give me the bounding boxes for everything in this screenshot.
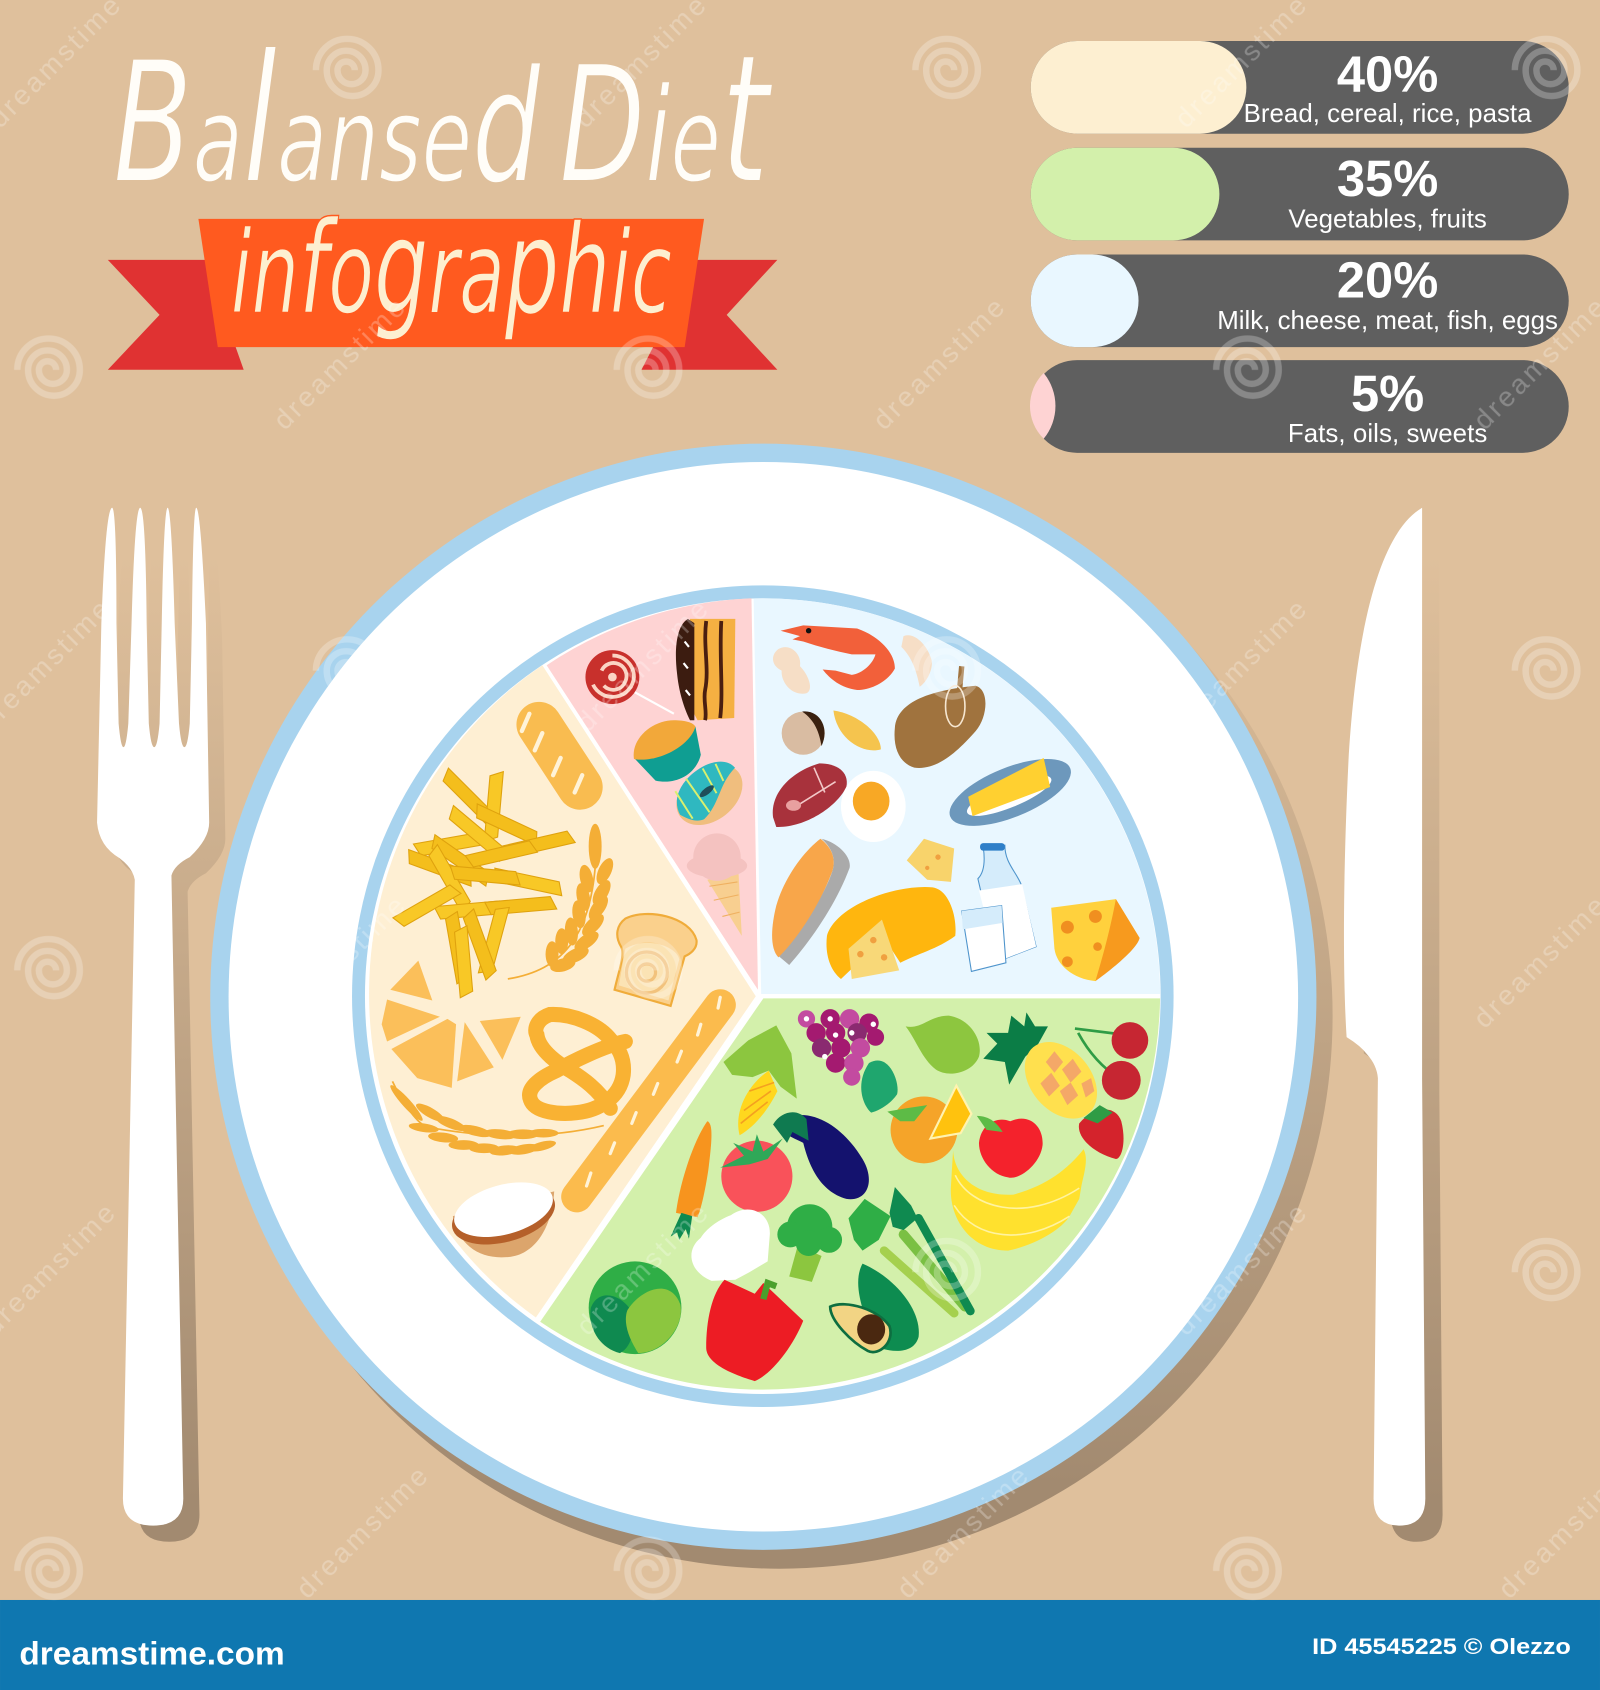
legend row: 40 percent: Bread, cereal, rice, pasta [1244, 100, 1532, 128]
pie slice: milk, meat, fish [754, 598, 1160, 994]
eggplant [773, 1112, 869, 1199]
milk bottle [978, 843, 1036, 962]
wheat ear lying [387, 1081, 604, 1157]
milk glass [962, 906, 1006, 971]
orange with lemon slice [887, 1086, 971, 1163]
watermark pattern: dreamstime [1168, 1197, 1312, 1341]
tomato [720, 1134, 792, 1212]
peanuts [773, 635, 932, 694]
fork [97, 508, 225, 1542]
cherries [1075, 1022, 1148, 1100]
pie slice: sweets [547, 598, 758, 990]
baguette [577, 997, 720, 1197]
banner text: infographic [231, 192, 672, 345]
legend row: 35 percent [1031, 148, 1569, 240]
pie slice: vegetables and fruits [540, 998, 1160, 1390]
almond [833, 711, 881, 750]
penne pasta [393, 768, 575, 998]
carrot [671, 1121, 711, 1240]
legend bars [1030, 41, 1569, 453]
hazelnut [782, 711, 825, 755]
legend row: 5 percent: 5% [1351, 365, 1424, 422]
roast chicken [895, 666, 985, 768]
bread loaf [522, 714, 582, 792]
bananas [951, 1149, 1086, 1251]
grapes [798, 1009, 884, 1086]
watermark pattern: dreamstime [570, 1197, 714, 1341]
cake slice [676, 619, 735, 720]
celery [849, 1187, 970, 1313]
watermark pattern: dreamstime [890, 1460, 1034, 1604]
legend row: 35 percent: Vegetables, fruits [1288, 205, 1487, 233]
shrimp [781, 625, 895, 690]
watermark pattern: dreamstime [1168, 593, 1312, 737]
wheat ear upright [508, 824, 617, 979]
legend row: 20 percent [1031, 252, 1569, 347]
legend row: 5 percent [1030, 360, 1569, 453]
pear [906, 1016, 980, 1074]
food: grains [382, 714, 720, 1257]
apple [977, 1116, 1043, 1178]
plate [210, 444, 1333, 1569]
mushrooms [691, 1209, 770, 1281]
broccoli [777, 1204, 842, 1282]
watermark pattern: dreamstime [267, 890, 411, 1034]
fried egg [841, 771, 906, 842]
red bell pepper [706, 1280, 803, 1381]
cheese wheel [826, 887, 956, 979]
lollipop [585, 650, 674, 714]
legend row: 20 percent: Milk, cheese, meat, fish, eggs [1217, 307, 1558, 335]
cheese wedge [1051, 899, 1140, 981]
footer credit: ID 45545225 © Olezzo [1312, 1634, 1571, 1659]
legend row: 35 percent: 35% [1337, 150, 1438, 207]
cabbage [589, 1261, 681, 1354]
title: Balansed Diet [113, 17, 773, 224]
strawberry [1079, 1105, 1124, 1159]
muffin [634, 720, 701, 782]
avocado [830, 1264, 919, 1352]
legend row: 5 percent: Fats, oils, sweets [1288, 420, 1487, 448]
legend row: 20 percent: 20% [1337, 252, 1438, 309]
salmon steak [772, 839, 850, 965]
toast slice [615, 914, 697, 1006]
banner ribbon [108, 192, 777, 370]
footer bar [0, 1600, 1600, 1690]
knife [1344, 508, 1443, 1542]
croissant [382, 961, 521, 1088]
watermark pattern: dreamstime [570, 593, 714, 737]
food: vegetables and fruits [589, 1009, 1148, 1381]
pie slice: bread and cereal [369, 665, 756, 1317]
food: sweets [585, 619, 754, 936]
legend row: 40 percent [1031, 41, 1569, 134]
footer brand: dreamstime.com [19, 1636, 285, 1672]
butter on dish [941, 745, 1080, 840]
pretzel [530, 1014, 625, 1113]
small cheese piece [907, 839, 954, 882]
watermark pattern: dreamstime [866, 292, 1010, 436]
legend row: 40 percent: 40% [1337, 46, 1438, 103]
watermark pattern: dreamstime [267, 292, 411, 436]
food: protein and dairy [772, 625, 1140, 981]
watermark pattern: dreamstime [290, 1460, 434, 1604]
pineapple [983, 1012, 1112, 1133]
corn [723, 1025, 797, 1135]
donut [664, 751, 754, 838]
ice cream cone [687, 833, 747, 936]
red meat [773, 763, 847, 827]
grape leaf [861, 1060, 898, 1113]
rice bowl [446, 1173, 562, 1257]
